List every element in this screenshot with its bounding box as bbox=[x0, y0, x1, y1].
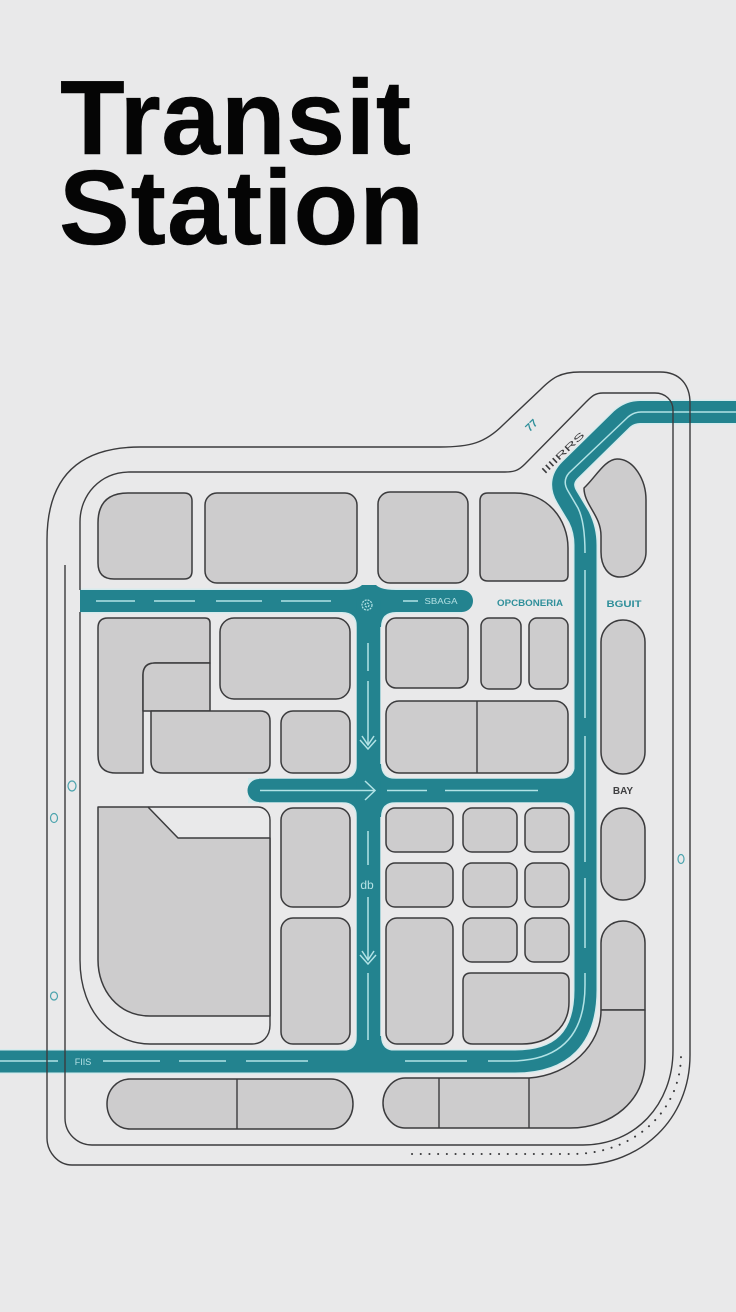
upper left blocks bbox=[98, 618, 350, 773]
middle column blocks bbox=[281, 808, 350, 1044]
station boundary lines bbox=[47, 372, 690, 1165]
large lower left block bbox=[98, 807, 270, 1016]
location markers bbox=[50, 781, 684, 1000]
icon: gear marker bbox=[362, 600, 372, 610]
road labels: SBAGA bbox=[424, 597, 458, 606]
road labels: BAY bbox=[613, 786, 633, 797]
title: Transit bbox=[60, 59, 411, 177]
lower right block grid bbox=[386, 808, 569, 1044]
road labels: BGUIT bbox=[606, 599, 642, 609]
road labels: FIIS bbox=[75, 1057, 91, 1067]
teal transit road network bbox=[0, 412, 736, 1062]
road labels: db bbox=[360, 878, 374, 892]
upper right blocks bbox=[386, 618, 568, 773]
road labels: IIIIRRS bbox=[539, 430, 587, 476]
title bbox=[59, 59, 424, 267]
road centre markings bbox=[0, 412, 736, 1061]
right side bays bbox=[584, 459, 646, 1010]
road labels: 77 bbox=[523, 417, 540, 434]
dotted track bbox=[412, 1055, 681, 1154]
top row blocks bbox=[98, 492, 568, 583]
title: Station bbox=[59, 149, 424, 267]
road labels: OPCBONERIA bbox=[497, 598, 564, 608]
bottom platforms bbox=[107, 1010, 645, 1129]
road labels bbox=[75, 417, 642, 1067]
